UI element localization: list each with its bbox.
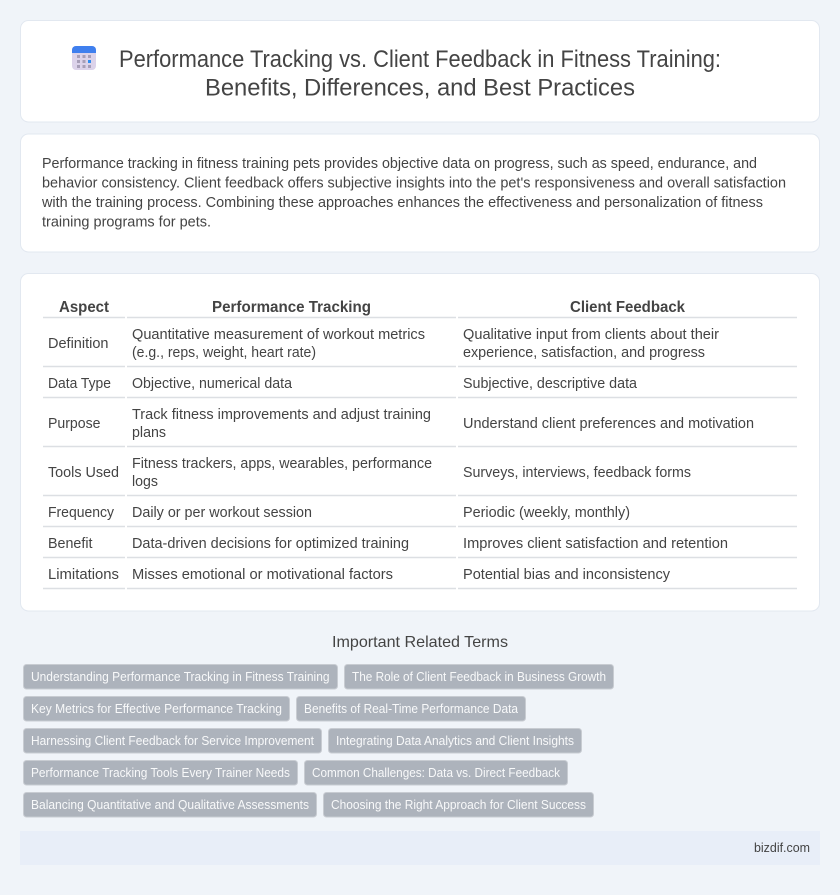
chip (24, 728, 322, 753)
table header row: Aspect (59, 299, 110, 316)
row: definition: experience, satisfaction, and progress (463, 345, 705, 361)
chip: Choosing the Right Approach for Client Success (331, 797, 586, 812)
row: frequency: Daily or per workout session (132, 505, 312, 521)
row: frequency: Periodic (weekly, monthly) (463, 505, 630, 521)
panel: introduction (20, 134, 820, 252)
row: tools used: Surveys, interviews, feedback forms (463, 465, 691, 481)
row: definition: Quantitative measurement of workout metrics (132, 327, 425, 343)
related term chips (24, 664, 614, 817)
row: frequency (48, 505, 630, 521)
table header row: Client Feedback (570, 299, 685, 316)
chip (324, 792, 594, 817)
row: data type: Subjective, descriptive data (463, 376, 637, 392)
row: purpose (48, 407, 754, 441)
row: purpose: Purpose (48, 416, 100, 432)
chip (328, 728, 582, 753)
chip: Integrating Data Analytics and Client Insights (336, 733, 574, 748)
chip (304, 760, 568, 785)
row: definition: Definition (48, 336, 108, 352)
chip: Balancing Quantitative and Qualitative Assessments (31, 797, 309, 812)
title (119, 46, 721, 102)
row: purpose: plans (132, 425, 166, 441)
chip (24, 696, 290, 721)
chip (296, 696, 526, 721)
table header row: Performance Tracking (212, 299, 371, 316)
row: definition: (e.g., reps, weight, heart rate) (132, 345, 316, 361)
footer: bizdif.com (754, 840, 810, 855)
row: frequency: Frequency (48, 505, 115, 521)
icon: calendar (72, 46, 96, 70)
text block: introduction: behavior consistency. Client feedback offers subjective insights into the pet's responsiveness and overall satisfaction (42, 176, 786, 192)
chip: The Role of Client Feedback in Business Growth (352, 669, 606, 684)
chip: Performance Tracking Tools Every Trainer Needs (31, 765, 290, 780)
row: tools used: Fitness trackers, apps, wearables, performance (132, 456, 432, 472)
title: Benefits, Differences, and Best Practices (205, 74, 635, 102)
row: data type: Objective, numerical data (132, 376, 292, 392)
footer (20, 831, 820, 865)
chip: Key Metrics for Effective Performance Tracking (31, 701, 282, 716)
chip: Benefits of Real-Time Performance Data (304, 701, 519, 716)
chip: Understanding Performance Tracking in Fitness Training (31, 669, 330, 684)
row: benefit: Benefit (48, 536, 92, 552)
chip: Harnessing Client Feedback for Service Improvement (31, 733, 314, 748)
chip (344, 664, 614, 689)
panel: comparison table (20, 274, 820, 611)
row: definition (48, 327, 719, 361)
row: purpose: Understand client preferences and motivation (463, 416, 754, 432)
row: limitations (48, 567, 671, 583)
row: benefit: Improves client satisfaction and retention (463, 536, 728, 552)
heading: important related terms: Important Related Terms (332, 634, 508, 651)
row: benefit (48, 536, 728, 552)
row: limitations: Limitations (48, 567, 119, 583)
text block: introduction: training programs for pets. (42, 214, 211, 230)
row: benefit: Data-driven decisions for optimized training (132, 536, 409, 552)
text block: introduction: Performance tracking in fitness training pets provides objective data on progress, such as speed, endurance, and (42, 156, 757, 172)
text block: introduction: with the training process. Combining these approaches enhances the effectiveness and personalization of fitness (41, 195, 763, 211)
row: tools used: logs (132, 474, 158, 490)
row: data type: Data Type (48, 376, 111, 392)
table header row (59, 299, 685, 316)
text block: introduction (41, 156, 786, 230)
chip (24, 664, 338, 689)
row: tools used: Tools Used (48, 465, 119, 481)
chip (24, 760, 298, 785)
row: definition: Qualitative input from clients about their (463, 327, 719, 343)
row: limitations: Potential bias and inconsistency (463, 567, 671, 583)
chip: Common Challenges: Data vs. Direct Feedback (312, 765, 561, 780)
panel: title header (20, 20, 820, 122)
row: limitations: Misses emotional or motivational factors (132, 567, 393, 583)
chip (24, 792, 316, 817)
row: purpose: Track fitness improvements and adjust training (132, 407, 431, 423)
row: data type (48, 376, 637, 392)
title: Performance Tracking vs. Client Feedback in Fitness Training: (119, 46, 721, 73)
row: tools used (48, 456, 691, 490)
